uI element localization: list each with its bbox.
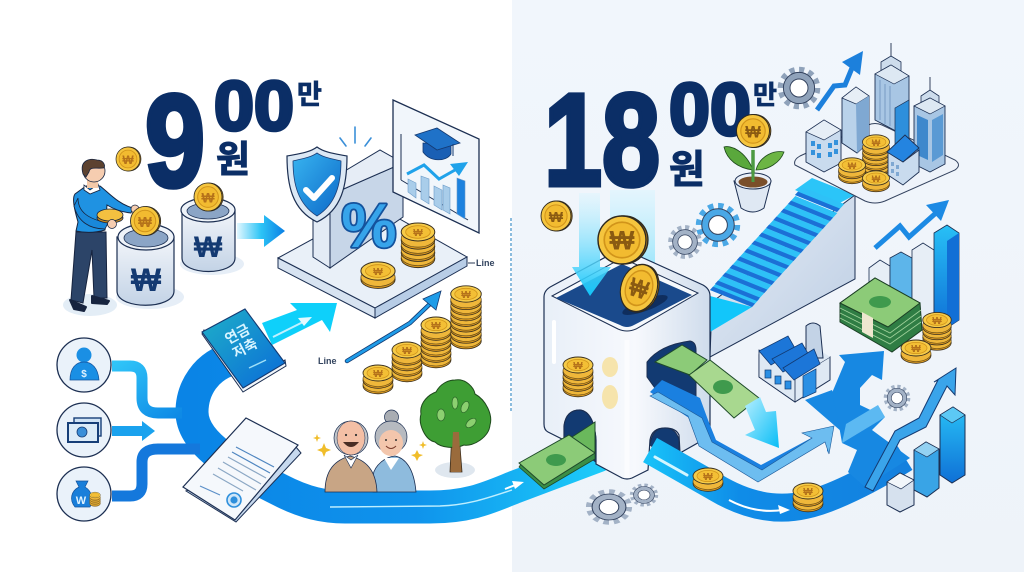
divider dashed line [510, 218, 512, 412]
big coin [598, 216, 648, 264]
light arrow band [650, 392, 834, 482]
jar 2 [180, 198, 244, 275]
white arrow in flow [505, 481, 524, 489]
label: Line [468, 258, 495, 268]
machine opening lower right [650, 428, 679, 458]
house [887, 135, 919, 185]
digits 00: 00 [669, 68, 751, 151]
coin stack city tall [862, 135, 890, 181]
bar 3 lower [940, 407, 965, 483]
rising line arrow [347, 291, 441, 361]
coin dropping into jar 1 [130, 206, 161, 236]
highlight of up arrow [842, 405, 885, 443]
book title: 저축 [230, 335, 260, 361]
staircase [710, 178, 855, 357]
main flow band: left [192, 358, 600, 507]
gears lower [590, 492, 628, 522]
coin stack by cash: ₩ [911, 344, 921, 355]
gears middle [699, 206, 737, 244]
icon circle: person with dollar: $ [81, 369, 87, 380]
digits 00: 00 [214, 67, 294, 145]
white arrow in cyan [273, 317, 312, 337]
coin stack by cash [901, 340, 931, 363]
machine opening lower left [564, 410, 596, 462]
unit won: 원 [216, 139, 250, 180]
floating coin: ₩ [122, 153, 134, 167]
platform block [278, 150, 467, 318]
factory [759, 323, 830, 402]
chart trend arrow [875, 200, 949, 248]
tree [420, 380, 491, 478]
unit man: 만 [753, 80, 777, 110]
trend arrow top [817, 51, 863, 110]
potted plant [724, 147, 784, 212]
coin stack city left: ₩ [848, 161, 857, 171]
big blue up arrow [832, 351, 885, 443]
machine slot [620, 291, 670, 319]
coin stack front [361, 262, 395, 288]
saw-tooth roofs [759, 336, 820, 380]
digit 9: 9 [145, 67, 205, 214]
coin above jar 2 [194, 183, 223, 211]
book [202, 309, 286, 392]
icon circle: money bag: W [76, 495, 87, 507]
stack 4: ₩ [461, 290, 471, 301]
cyan arrow to platform [262, 303, 337, 345]
unit won: 원 [669, 149, 705, 192]
shield rays [340, 127, 371, 146]
stack 3: ₩ [431, 321, 441, 332]
coin stack on platform [401, 223, 435, 268]
connector 2 arrow [112, 421, 155, 441]
cyan arrow down [745, 397, 779, 448]
arrow to platform [237, 215, 285, 247]
icon circle: banknotes [57, 403, 111, 457]
connector 3 [112, 449, 200, 496]
gear top [781, 70, 817, 106]
building tall [875, 43, 909, 148]
coin on plant [736, 114, 771, 148]
percent sign: % [341, 192, 397, 261]
jar 1 [116, 224, 184, 309]
coin above jar 2: ₩ [201, 190, 215, 206]
connector 1 [112, 366, 182, 413]
icon: shield check [287, 147, 347, 222]
band out of machine [650, 380, 834, 480]
floating coin right: ₩ [549, 209, 564, 226]
coin stack on platform: ₩ [413, 228, 423, 239]
gear right [886, 387, 908, 409]
big coin: ₩ [610, 226, 635, 256]
background: left half [0, 0, 512, 572]
beam light [610, 190, 655, 274]
background: right half [512, 0, 1024, 572]
seal [227, 493, 241, 507]
faded coins on machine [602, 357, 618, 409]
coin stack lower right: ₩ [803, 487, 813, 498]
sparkles [313, 434, 427, 461]
gear middle small [671, 228, 699, 256]
coins by cash: ₩ [932, 316, 942, 327]
coin in slot: ₩ [625, 272, 653, 306]
machine opening upper [647, 341, 696, 400]
coin stack on machine [563, 357, 593, 397]
white arrow: lower flow start [655, 457, 687, 475]
coin stack city left [838, 158, 866, 184]
label: Line: Line [476, 258, 495, 268]
machine [544, 250, 710, 479]
coin stack city tall: ₩ [872, 138, 881, 148]
cash bills from upper opening [655, 345, 759, 418]
bar 1 lower [887, 473, 914, 512]
unit man: 만 [297, 80, 322, 110]
coins by cash [923, 312, 951, 350]
book title: 연금 [222, 321, 252, 347]
highlight in flow band [330, 490, 512, 507]
building small [806, 120, 841, 172]
coin stack on machine: ₩ [573, 361, 583, 372]
stack 2: ₩ [402, 346, 412, 357]
label: Line: Line [318, 356, 337, 366]
cash stack [840, 278, 922, 352]
elderly couple [325, 410, 416, 492]
building mid [842, 87, 869, 153]
bar 2 lower [914, 442, 939, 497]
city platform [795, 124, 958, 203]
title: 900만원 [145, 67, 322, 214]
coin stack lower left: ₩ [703, 472, 713, 483]
coin stack city front: ₩ [872, 174, 881, 184]
panel bars [408, 176, 465, 219]
coin stack front: ₩ [373, 267, 383, 278]
coin in slot [614, 260, 665, 317]
chart bars upper right [869, 225, 959, 330]
coin on plant: ₩ [745, 124, 761, 142]
cash leaving left arch [519, 422, 595, 489]
lower blue merge [842, 417, 910, 487]
graduation cap [415, 128, 460, 160]
chart panel with graduation cap [393, 100, 479, 233]
coin dropping into jar 1: ₩ [138, 215, 152, 231]
digits 18: 18 [544, 66, 660, 213]
icon circle: person with dollar [57, 338, 111, 392]
floating coin right [541, 201, 572, 231]
coin stack lower right [793, 483, 823, 512]
title: 1800만원 [544, 66, 777, 213]
document [183, 418, 301, 522]
panel trend arrow [407, 162, 468, 179]
gear lower small [632, 485, 656, 505]
coin stack city front [862, 171, 890, 192]
building right [914, 77, 945, 172]
coin staircase stacks [363, 286, 481, 394]
white arrow: lower flow [729, 500, 790, 514]
person [70, 159, 139, 311]
rising arrow right [865, 368, 956, 491]
chimney [806, 323, 823, 358]
lower blue flow [650, 450, 905, 508]
icon circle: money bag [57, 467, 111, 521]
stack 1: ₩ [373, 369, 383, 380]
blue band behind factory [805, 390, 845, 432]
jar 1: ₩ [131, 262, 162, 298]
coin stack lower left [693, 468, 723, 491]
cyan down arrow into machine [572, 193, 611, 296]
person shadow [63, 294, 117, 316]
jar 2: ₩ [194, 231, 223, 264]
floating coin [116, 147, 141, 171]
